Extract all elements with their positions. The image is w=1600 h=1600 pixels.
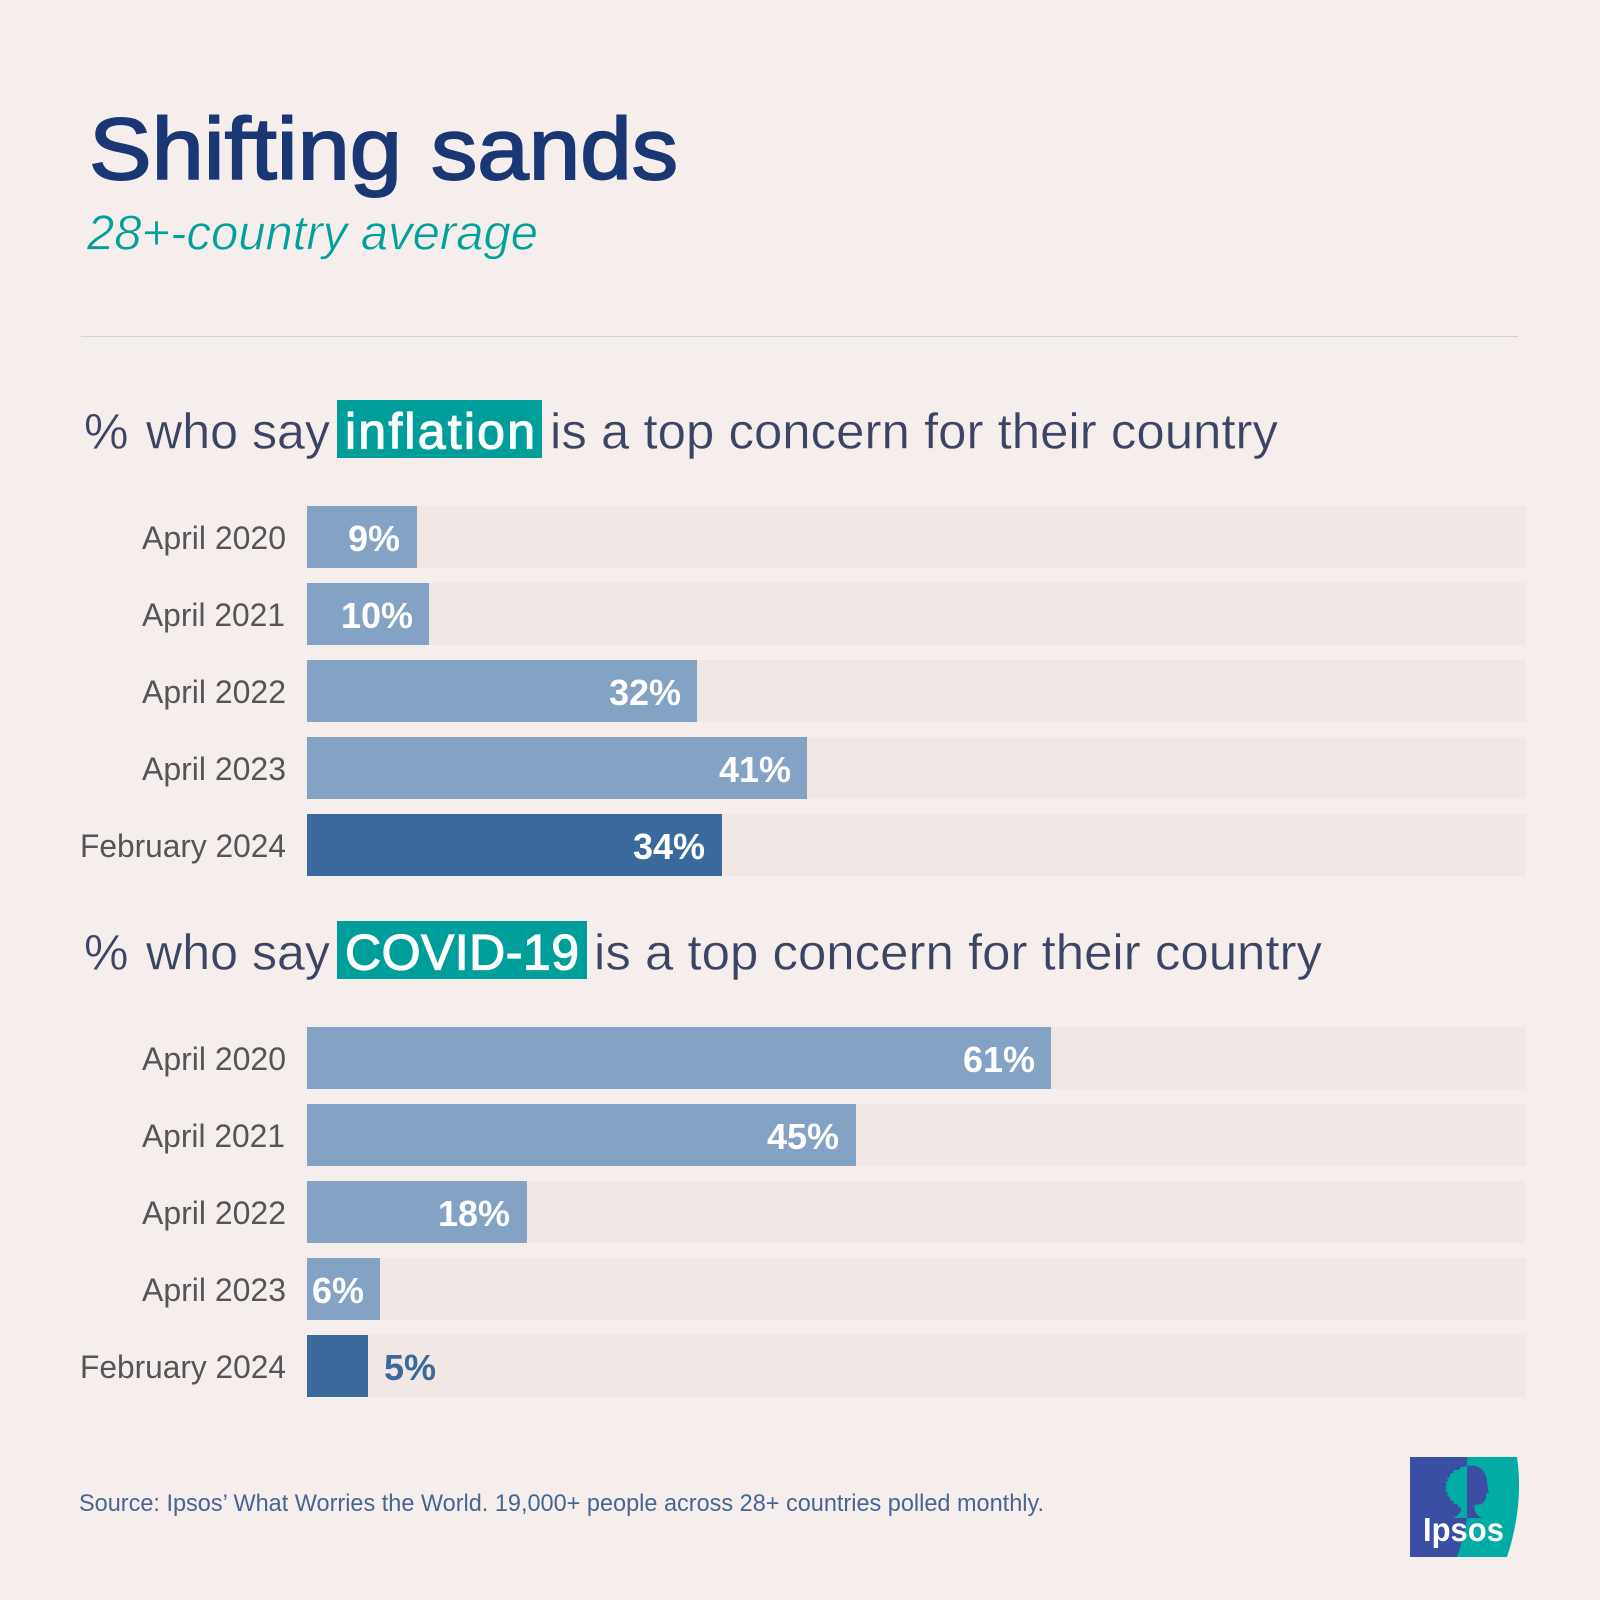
row: April 2021 inflation 10%: April 2021 (142, 597, 285, 633)
row: April 2021 COVID 45%: 45% (767, 1116, 839, 1157)
row: April 2020 COVID 61% (142, 1027, 1526, 1089)
row: April 2022 COVID 18%: 18% (438, 1193, 510, 1234)
row: April 2020 inflation 9%: April 2020 (142, 520, 286, 556)
bar chart: inflation (80, 506, 1526, 876)
title: Shifting (89, 101, 402, 198)
row: April 2023 inflation 41%: 41% (719, 749, 791, 790)
title (89, 101, 678, 198)
row: April 2020 COVID 61%: April 2020 (142, 1041, 286, 1077)
row: April 2023 COVID 6%: April 2023 (142, 1272, 286, 1308)
heading: COVID-19: who say (145, 924, 330, 980)
row: April 2021 COVID 45%: April 2021 (142, 1118, 285, 1154)
heading: COVID-19 (84, 921, 1322, 980)
row: April 2021 inflation 10% (142, 583, 1526, 645)
row: April 2020 inflation 9% (142, 506, 1526, 568)
row: April 2022 COVID 18% (142, 1181, 1526, 1243)
heading: inflation: % (84, 404, 128, 460)
logo: Ipsos (1410, 1457, 1519, 1557)
row: April 2021 COVID 45% (142, 1104, 1526, 1166)
row: February 2024 COVID 5%: February 2024 (80, 1349, 286, 1385)
heading: inflation: is a top concern for their country (550, 404, 1278, 460)
row: February 2024 COVID 5% (80, 1335, 1526, 1397)
heading: inflation: who say (145, 404, 330, 460)
row: April 2021 inflation 10%: 10% (341, 595, 413, 636)
source note: Source: Ipsos’ What Worries the World. 19,000+ people across 28+ countries polled monthly. (79, 1490, 1044, 1517)
row: April 2023 inflation 41%: April 2023 (142, 751, 286, 787)
row: April 2023 COVID 6%: 6% (312, 1270, 364, 1311)
row: February 2024 COVID 5%: 5% (384, 1347, 436, 1388)
row: April 2023 COVID 6% (142, 1258, 1526, 1320)
row: April 2022 inflation 32%: April 2022 (142, 674, 286, 710)
subtitle: 28+-country average (86, 206, 538, 260)
highlight: inflation: inflation (345, 404, 535, 460)
row: April 2022 inflation 32%: 32% (609, 672, 681, 713)
row: February 2024 inflation 34% (80, 814, 1526, 876)
row: April 2022 COVID 18%: April 2022 (142, 1195, 286, 1231)
row: February 2024 inflation 34%: 34% (633, 826, 705, 867)
row: April 2023 inflation 41% (142, 737, 1526, 799)
heading: COVID-19: is a top concern for their country (594, 924, 1322, 980)
heading: inflation (84, 400, 1278, 460)
row: April 2022 inflation 32% (142, 660, 1526, 722)
title: sands (431, 101, 678, 198)
heading: COVID-19: % (84, 924, 128, 980)
row: February 2024 inflation 34%: February 2024 (80, 828, 286, 864)
highlight: COVID-19: COVID-19 (345, 924, 579, 980)
row: April 2020 inflation 9%: 9% (348, 518, 400, 559)
logo: Ipsos: Ipsos (1423, 1511, 1504, 1548)
row: April 2020 COVID 61%: 61% (963, 1039, 1035, 1080)
bar chart: COVID-19 (80, 1027, 1526, 1397)
